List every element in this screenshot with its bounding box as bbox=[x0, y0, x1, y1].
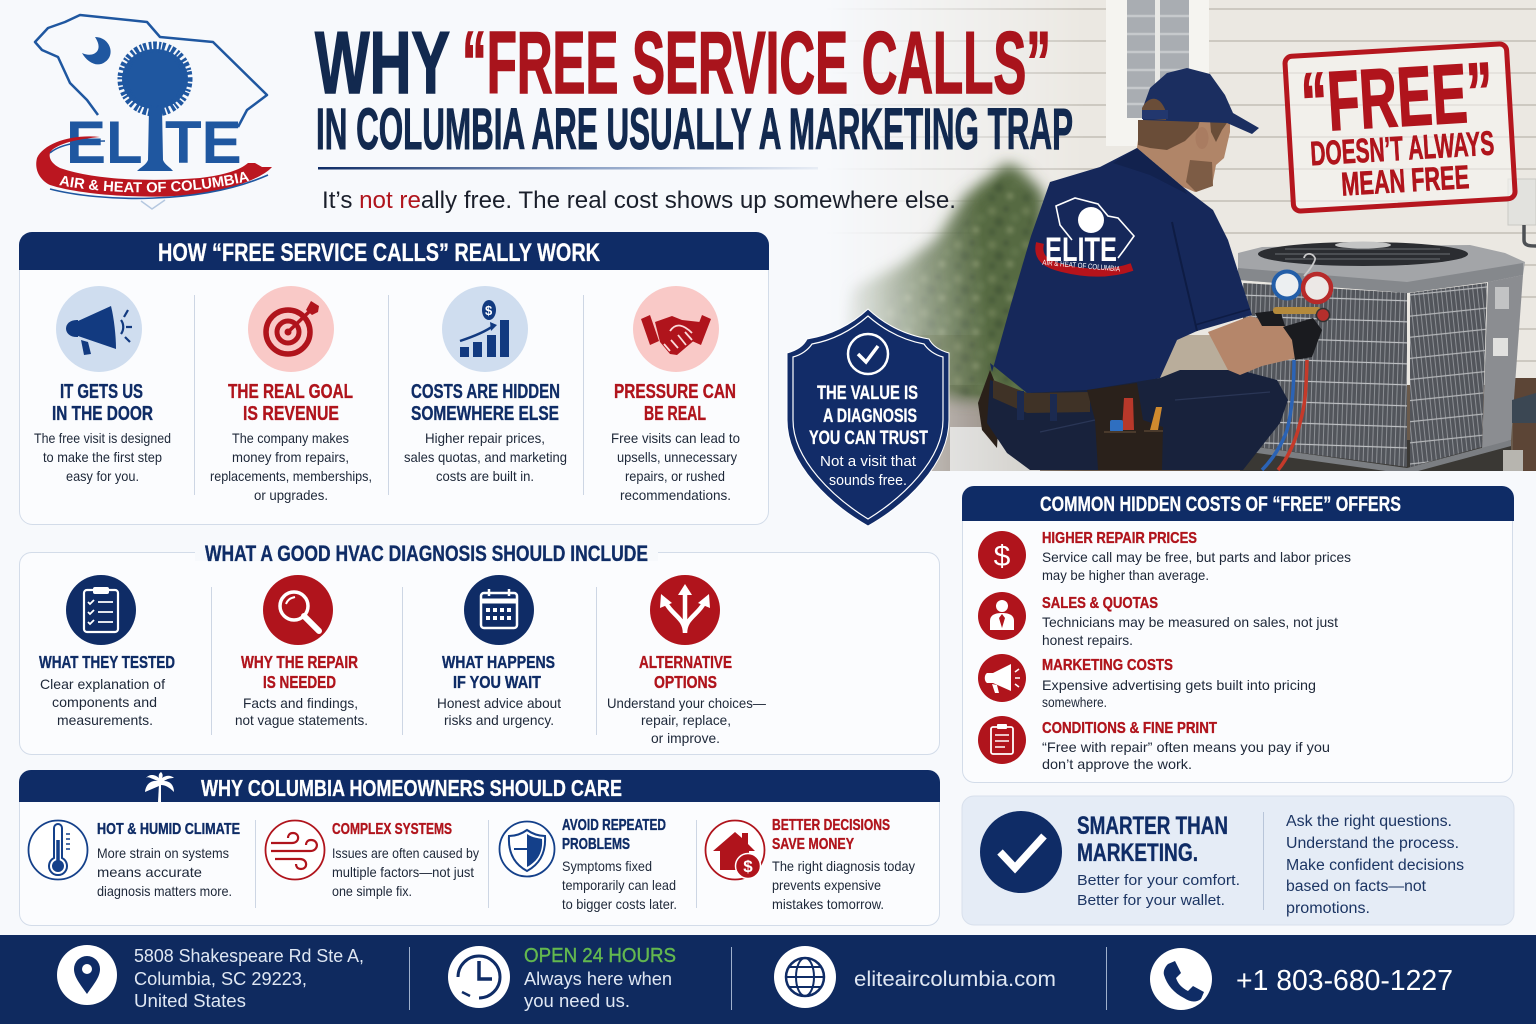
column: the real goal is revenue: or upgrades. bbox=[254, 488, 328, 503]
panel header: COMMON HIDDEN COSTS OF “FREE” OFFERS bbox=[1040, 493, 1401, 516]
item: higher repair prices: HIGHER REPAIR PRICES bbox=[1042, 530, 1197, 547]
icon: electrical box and conduit bbox=[1508, 179, 1536, 246]
column: why the repair is needed: IS NEEDED bbox=[263, 672, 336, 692]
item: conditions and fine print: “Free with repair” often means you pay if you bbox=[1042, 740, 1330, 755]
beard bbox=[1186, 160, 1213, 192]
column: it gets us in the door: The free visit is designed bbox=[34, 431, 171, 446]
icon: palm tree bbox=[145, 772, 174, 802]
column: alternative options: ALTERNATIVE bbox=[639, 652, 732, 672]
footer bbox=[0, 935, 1536, 1024]
icon: check circle bbox=[848, 334, 888, 374]
item: complex systems: COMPLEX SYSTEMS bbox=[332, 821, 452, 838]
address: Columbia, SC 29223, bbox=[134, 968, 307, 989]
logo: Elite Air & Heat of Columbia bbox=[34, 14, 272, 210]
hours: Always here when bbox=[524, 968, 672, 989]
banner text bbox=[59, 180, 252, 192]
panel header: WHY COLUMBIA HOMEOWNERS SHOULD CARE bbox=[201, 775, 622, 801]
column: what they tested: measurements. bbox=[57, 712, 153, 728]
column: it gets us in the door: to make the first step bbox=[43, 450, 162, 465]
tool belt side pouch bbox=[978, 370, 998, 448]
cap bbox=[1142, 68, 1259, 134]
callout text: Ask the right questions. bbox=[1286, 813, 1452, 830]
collar bbox=[1113, 148, 1187, 194]
icon: telephone bbox=[1150, 948, 1212, 1010]
column: alternative options: Understand your choices— bbox=[607, 695, 766, 711]
icon: megaphone small bbox=[978, 654, 1026, 702]
title bbox=[315, 13, 1073, 162]
column: costs are hidden somewhere else: sales quotas, and marketing bbox=[404, 450, 567, 465]
column: the real goal is revenue: IS REVENUE bbox=[243, 403, 339, 425]
hours: you need us. bbox=[524, 990, 630, 1011]
address: United States bbox=[134, 990, 246, 1011]
column: the real goal is revenue bbox=[210, 381, 372, 503]
shirt logo: ELITE bbox=[1045, 231, 1117, 269]
icon: clock bbox=[448, 946, 510, 1008]
icon: salesperson bbox=[978, 592, 1026, 640]
column: what happens if you wait: IF YOU WAIT bbox=[453, 672, 541, 692]
column: what happens if you wait: risks and urgency. bbox=[444, 712, 554, 728]
icon: large check bbox=[980, 811, 1062, 893]
column: alternative options: OPTIONS bbox=[654, 672, 717, 692]
column: what they tested: WHAT THEY TESTED bbox=[39, 652, 175, 672]
column: the real goal is revenue: replacements, memberships, bbox=[210, 469, 372, 484]
icon: calendar bbox=[464, 575, 534, 645]
item: higher repair prices bbox=[1042, 530, 1351, 583]
far hand bbox=[1255, 310, 1285, 326]
side panel bbox=[1482, 275, 1523, 450]
shirt logo: AIR & HEAT OF COLUMBIA bbox=[1042, 258, 1120, 273]
panel: smarter than marketing bbox=[962, 796, 1514, 925]
panel: what a good HVAC diagnosis should include bbox=[20, 541, 940, 754]
ear bbox=[1196, 127, 1208, 149]
item: complex systems bbox=[332, 821, 479, 899]
shield badge: the value is a diagnosis: YOU CAN TRUST bbox=[809, 427, 928, 449]
column: why the repair is needed: WHY THE REPAIR bbox=[241, 652, 358, 672]
icon: diverging arrows bbox=[650, 575, 720, 645]
icon: thermometer bbox=[28, 820, 88, 880]
column: pressure can be real: recommendations. bbox=[620, 488, 731, 503]
item: marketing costs bbox=[1042, 657, 1316, 710]
item: sales and quotas: honest repairs. bbox=[1042, 633, 1133, 648]
base bbox=[1256, 440, 1511, 471]
column: what happens if you wait: WHAT HAPPENS bbox=[442, 652, 555, 672]
icon: megaphone bbox=[56, 286, 142, 372]
shield badge: the value is a diagnosis: Not a visit that bbox=[820, 454, 916, 470]
column: pressure can be real: upsells, unnecessary bbox=[617, 450, 737, 465]
callout heading: Better for your wallet. bbox=[1077, 892, 1225, 909]
column: pressure can be real: PRESSURE CAN bbox=[614, 381, 736, 403]
hours bbox=[524, 945, 676, 1011]
column: alternative options bbox=[607, 652, 766, 746]
callout text: Make confident decisions bbox=[1286, 857, 1464, 874]
column: the real goal is revenue: THE REAL GOAL bbox=[228, 381, 353, 403]
item: avoid repeated problems: Symptoms fixed bbox=[562, 859, 652, 874]
column: costs are hidden somewhere else: Higher repair prices, bbox=[425, 431, 545, 446]
crescent moon bbox=[82, 37, 111, 64]
column: it gets us in the door bbox=[34, 381, 171, 484]
belt bbox=[993, 380, 1090, 413]
callout heading bbox=[1077, 812, 1240, 909]
callout text: Understand the process. bbox=[1286, 835, 1459, 852]
icon: rising cost chart bbox=[442, 286, 528, 372]
column: alternative options: or improve. bbox=[651, 730, 720, 746]
column: pressure can be real: BE REAL bbox=[644, 403, 706, 425]
item: better decisions save money: SAVE MONEY bbox=[772, 836, 855, 853]
column: pressure can be real bbox=[611, 381, 740, 503]
item: higher repair prices: Service call may be free, but parts and labor prices bbox=[1042, 550, 1351, 565]
item: conditions and fine print: CONDITIONS & FINE PRINT bbox=[1042, 720, 1217, 737]
column: pressure can be real: repairs, or rushed bbox=[625, 469, 725, 484]
shield badge: the value is a diagnosis: sounds free. bbox=[829, 473, 907, 489]
wordmark: I bbox=[147, 109, 164, 176]
title: “FREE SERVICE CALLS” bbox=[462, 13, 1051, 112]
item: sales and quotas: Technicians may be measured on sales, not just bbox=[1042, 615, 1338, 630]
column: what they tested: Clear explanation of bbox=[40, 676, 165, 692]
website: eliteaircolumbia.com bbox=[854, 968, 1056, 991]
icon: AC condenser unit bbox=[1238, 242, 1536, 474]
column: it gets us in the door: IN THE DOOR bbox=[52, 403, 153, 425]
column: what they tested: components and bbox=[52, 694, 157, 710]
arm bbox=[1208, 316, 1297, 375]
item: conditions and fine print bbox=[1042, 720, 1330, 772]
item: avoid repeated problems: AVOID REPEATED bbox=[562, 817, 666, 834]
gauges and hoses bbox=[1262, 254, 1331, 470]
stamp: free doesn't always mean free: MEAN FREE bbox=[1340, 158, 1470, 203]
panel header bbox=[19, 232, 769, 270]
wordmark: EL bbox=[66, 109, 143, 176]
icon: technician bbox=[978, 68, 1331, 470]
callout heading: SMARTER THAN bbox=[1077, 812, 1228, 840]
neck and face bbox=[1137, 120, 1230, 192]
item: sales and quotas bbox=[1042, 595, 1338, 648]
panel: common hidden costs bbox=[962, 486, 1514, 782]
stamp: free doesn't always mean free bbox=[1285, 44, 1515, 211]
item: better decisions save money: BETTER DECISIONS bbox=[772, 817, 890, 834]
icon: rising cost chart: $ bbox=[485, 303, 493, 318]
pants bbox=[987, 370, 1288, 470]
shield badge: the value is a diagnosis: A DIAGNOSIS bbox=[823, 405, 917, 427]
icon: target bbox=[248, 286, 334, 372]
column: costs are hidden somewhere else bbox=[404, 381, 567, 484]
panel header: HOW “FREE SERVICE CALLS” REALLY WORK bbox=[158, 239, 600, 267]
shield badge: the value is a diagnosis: THE VALUE IS bbox=[817, 382, 918, 404]
address: 5808 Shakespeare Rd Ste A, bbox=[134, 945, 364, 966]
fan guard bbox=[1258, 242, 1468, 266]
column: it gets us in the door: easy for you. bbox=[66, 469, 139, 484]
column: alternative options: repair, replace, bbox=[641, 712, 731, 728]
column: why the repair is needed: not vague statements. bbox=[235, 712, 368, 728]
item: better decisions save money: mistakes tomorrow. bbox=[772, 897, 884, 912]
shirt logo bbox=[1039, 198, 1134, 273]
logo: Elite Air & Heat of Columbia: AIR & HEAT OF COLUMBIA bbox=[59, 172, 250, 192]
icon: shield bbox=[500, 822, 554, 876]
item: hot and humid climate bbox=[97, 821, 240, 899]
icon: handshake bbox=[633, 286, 719, 372]
item: marketing costs: somewhere. bbox=[1042, 695, 1107, 710]
drain pipe bbox=[1512, 393, 1536, 423]
glove bbox=[1283, 318, 1322, 360]
panel header bbox=[962, 486, 1514, 521]
item: complex systems: Issues are often caused by bbox=[332, 846, 479, 861]
hero photo: technician servicing AC unit bbox=[790, 0, 1536, 474]
panel: why Columbia homeowners should care bbox=[19, 770, 940, 926]
item: better decisions save money: The right diagnosis today bbox=[772, 859, 915, 874]
callout text bbox=[1286, 813, 1464, 917]
item: avoid repeated problems bbox=[562, 817, 677, 912]
icon: wind bbox=[266, 820, 324, 880]
title: WHY bbox=[315, 13, 450, 112]
item: better decisions save money bbox=[772, 817, 915, 912]
item: avoid repeated problems: PROBLEMS bbox=[562, 836, 630, 853]
item: avoid repeated problems: temporarily can lead bbox=[562, 878, 676, 893]
icon: dollar: $ bbox=[994, 540, 1011, 573]
item: marketing costs: MARKETING COSTS bbox=[1042, 657, 1173, 674]
top housing bbox=[1238, 245, 1525, 293]
item: complex systems: multiple factors—not just bbox=[332, 865, 474, 880]
column: the real goal is revenue: money from repairs, bbox=[232, 450, 349, 465]
column: the real goal is revenue: The company makes bbox=[232, 431, 349, 446]
callout text: promotions. bbox=[1286, 900, 1370, 917]
icon: clipboard bbox=[66, 575, 136, 645]
column: pressure can be real: Free visits can lead to bbox=[611, 431, 740, 446]
column: it gets us in the door: IT GETS US bbox=[60, 381, 143, 403]
item: hot and humid climate: More strain on systems bbox=[97, 846, 229, 861]
icon: shrub bbox=[840, 163, 1045, 400]
panel heading: WHAT A GOOD HVAC DIAGNOSIS SHOULD INCLUDE bbox=[205, 541, 648, 566]
column: what happens if you wait: Honest advice about bbox=[437, 695, 561, 711]
icon: fine print document bbox=[978, 716, 1026, 764]
icon: globe bbox=[774, 946, 836, 1008]
siding wall bbox=[790, 0, 1536, 471]
column: costs are hidden somewhere else: SOMEWHERE ELSE bbox=[411, 403, 559, 425]
icon: magnifying glass bbox=[263, 575, 333, 645]
shirt bbox=[990, 148, 1252, 393]
banner swoosh bbox=[36, 136, 272, 197]
icon: window bbox=[1106, 0, 1209, 146]
item: marketing costs: Expensive advertising gets built into pricing bbox=[1042, 678, 1316, 693]
item: better decisions save money: prevents expensive bbox=[772, 878, 881, 893]
item: hot and humid climate: HOT & HUMID CLIMATE bbox=[97, 821, 240, 838]
icon: house and money bbox=[706, 820, 764, 880]
column: costs are hidden somewhere else: costs are built in. bbox=[436, 469, 534, 484]
front grille right bbox=[1410, 283, 1487, 467]
subtitle: It’s not really free. The real cost shows up somewhere else. bbox=[322, 187, 956, 214]
column: why the repair is needed bbox=[235, 652, 368, 728]
front grille left bbox=[1243, 283, 1407, 467]
column: what happens if you wait bbox=[437, 652, 561, 728]
palm trunk bbox=[137, 108, 173, 171]
column: why the repair is needed: Facts and findings, bbox=[243, 695, 358, 711]
callout heading: MARKETING. bbox=[1077, 839, 1198, 867]
hours: OPEN 24 HOURS bbox=[524, 945, 676, 967]
item: hot and humid climate: diagnosis matters more. bbox=[97, 884, 232, 899]
phone number: +1 803-680-1227 bbox=[1236, 965, 1453, 997]
address bbox=[134, 945, 364, 1011]
callout text: based on facts—not bbox=[1286, 878, 1427, 895]
wordmark: TE bbox=[165, 109, 242, 176]
callout heading: Better for your comfort. bbox=[1077, 872, 1240, 889]
tool pouch bbox=[1087, 383, 1163, 470]
item: complex systems: one simple fix. bbox=[332, 884, 412, 899]
item: conditions and fine print: don’t approve the work. bbox=[1042, 757, 1192, 772]
icon: dollar bbox=[978, 531, 1026, 579]
icon: location pin bbox=[57, 945, 117, 1005]
item: higher repair prices: may be higher than average. bbox=[1042, 568, 1209, 583]
state outline bbox=[35, 15, 267, 127]
panel: how free service calls really work bbox=[19, 232, 769, 524]
panel header bbox=[19, 770, 940, 802]
hair bbox=[1138, 120, 1200, 150]
item: avoid repeated problems: to bigger costs later. bbox=[562, 897, 677, 912]
shield badge: the value is a diagnosis bbox=[787, 309, 949, 526]
item: sales and quotas: SALES & QUOTAS bbox=[1042, 595, 1158, 612]
ground right of unit bbox=[1513, 378, 1536, 471]
shadow and concrete pad bbox=[1240, 440, 1511, 471]
palm crown bbox=[122, 47, 188, 111]
column: what they tested bbox=[39, 652, 175, 728]
item: hot and humid climate: means accurate bbox=[97, 865, 202, 880]
icon: house and money: $ bbox=[743, 857, 753, 876]
column: costs are hidden somewhere else: COSTS ARE HIDDEN bbox=[411, 381, 560, 403]
